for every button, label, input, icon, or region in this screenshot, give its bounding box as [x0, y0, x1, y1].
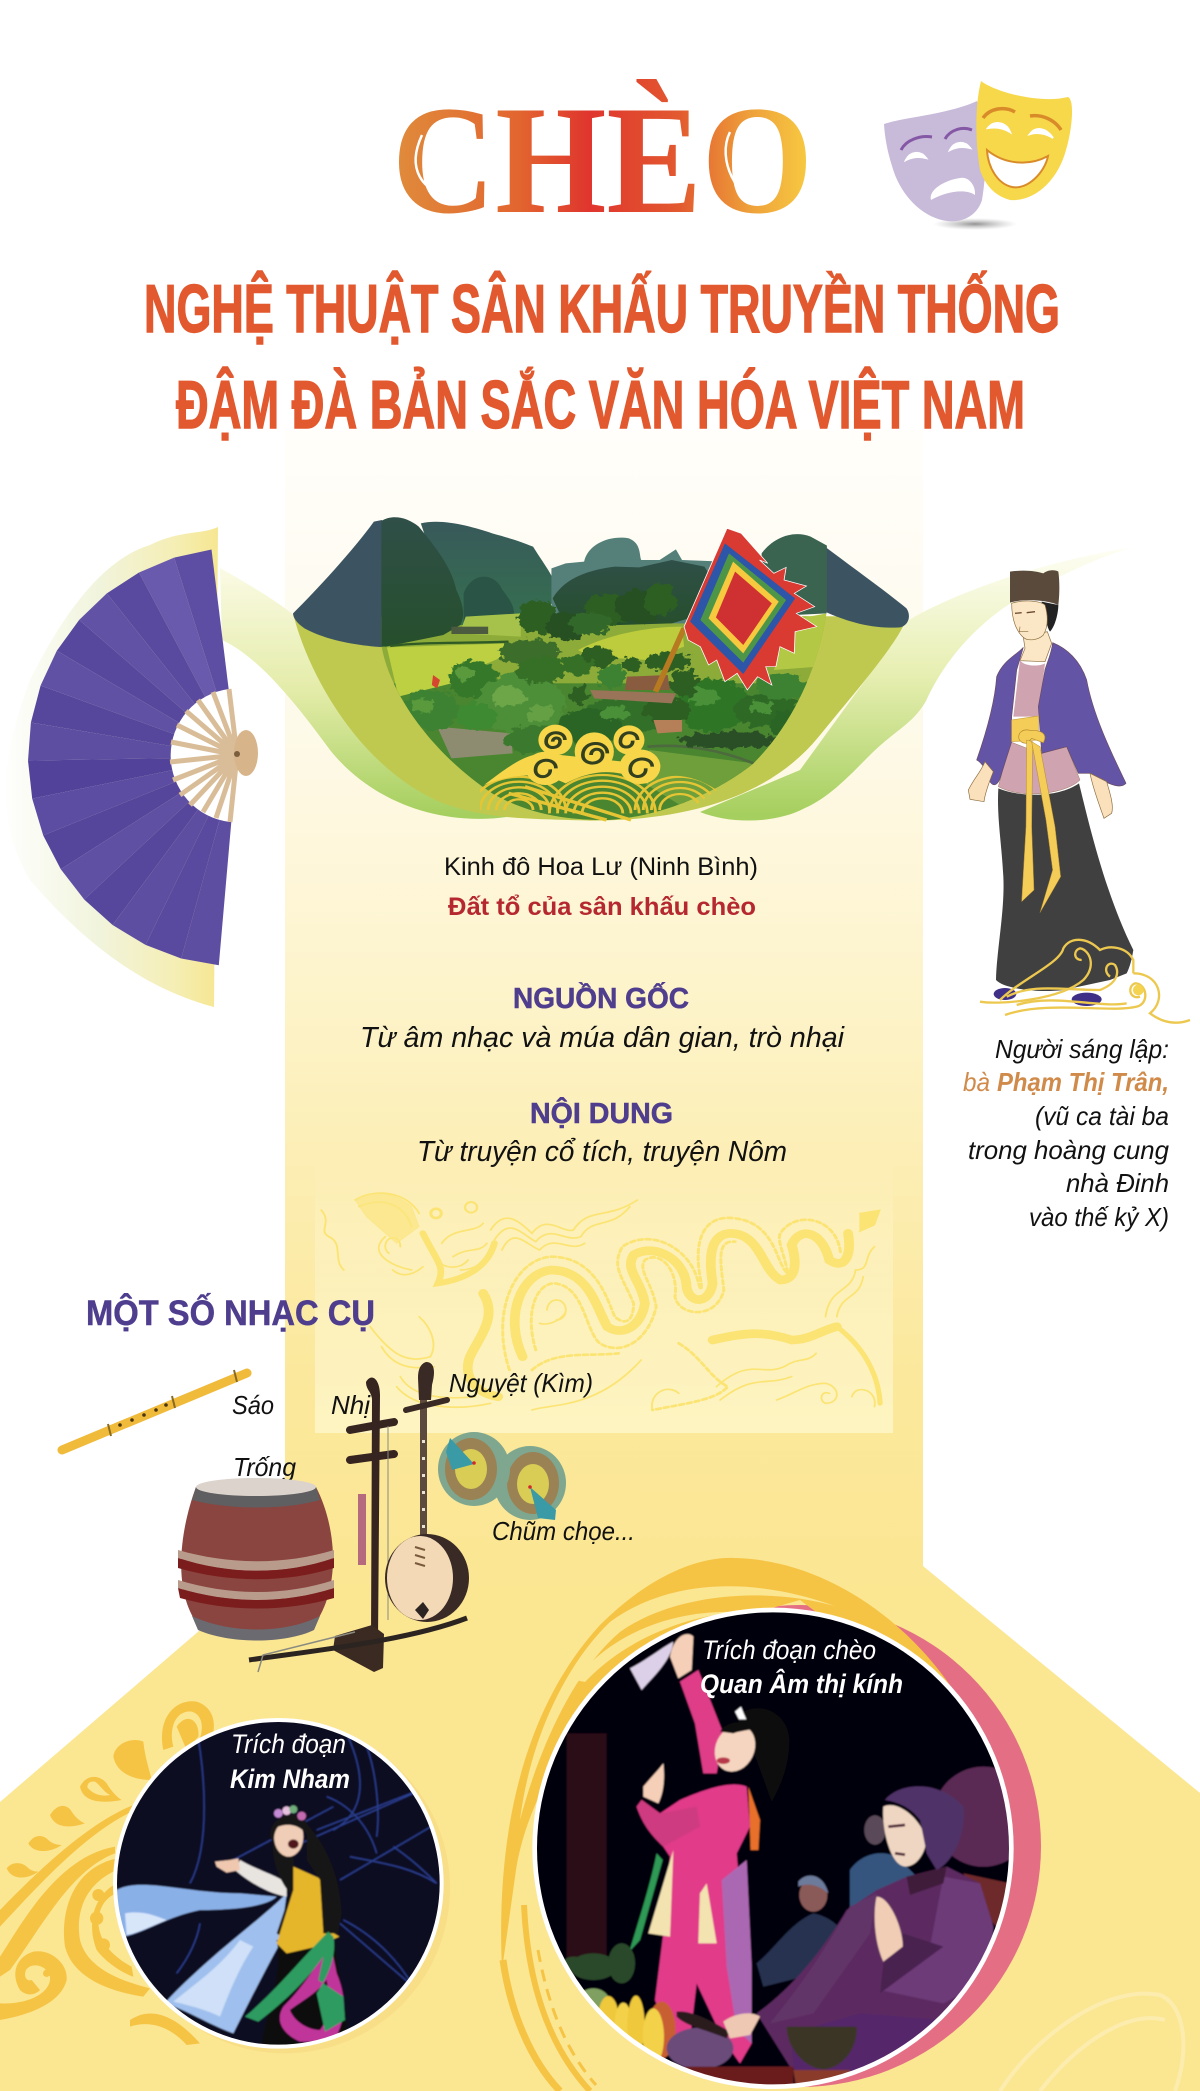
icon: đàn nguyệt — [385, 1362, 469, 1622]
caption: founder: vào thế kỷ X) — [1029, 1202, 1169, 1232]
caption: Quan Âm thị kính: Quan Âm thị kính — [700, 1668, 903, 1699]
panel: landscape of Hoa Lư — [293, 517, 909, 823]
panel: Kim Nham photo — [0, 1701, 450, 2057]
text block: origin — [360, 981, 846, 1054]
caption: Quan Âm thị kính: Trích đoạn chèo — [702, 1635, 876, 1665]
photo content — [530, 1607, 1033, 2091]
label: Nhị: Nhị — [331, 1390, 371, 1420]
label: Trống: Trống — [233, 1452, 297, 1482]
text block: origin: NGUỒN GỐC — [513, 981, 689, 1015]
caption: Hoa Lư: Kinh đô Hoa Lư (Ninh Bình) — [444, 853, 758, 881]
label: Nguyệt: Nguyệt (Kìm) — [449, 1368, 593, 1398]
caption: founder: bà — [963, 1067, 990, 1097]
slate wedge: left — [293, 520, 385, 647]
trees — [403, 583, 807, 753]
icon: sáo flute — [62, 1370, 247, 1450]
heading — [144, 270, 1060, 443]
caption: Hoa Lư — [444, 853, 758, 921]
icon: chũm chọe cymbals — [438, 1432, 566, 1520]
panel: Quan Âm thị kính photo — [530, 1607, 1033, 2091]
text block: content: Từ truyện cổ tích, truyện Nôm — [417, 1136, 787, 1168]
photo content — [117, 1722, 440, 2045]
decoration: pink crescent — [559, 1605, 1041, 2087]
icon: purple fan — [6, 527, 258, 1007]
icon: festival flag — [656, 528, 817, 692]
caption: founder — [963, 1034, 1170, 1232]
caption: Kim Nham: Kim Nham — [230, 1764, 350, 1794]
label: Sáo: Sáo — [232, 1390, 274, 1420]
decorative pale curves — [1000, 1994, 1183, 2091]
caption: Kim Nham: Trích đoạn — [231, 1729, 346, 1759]
icon: đàn nhị — [249, 1378, 467, 1672]
text block: content — [417, 1096, 787, 1168]
caption: founder: Phạm Thị Trân, — [997, 1067, 1169, 1097]
photo shadow crescent — [120, 1723, 450, 2053]
caption: Quan Âm thị kính — [700, 1635, 903, 1699]
background column and flare — [0, 430, 1200, 2091]
caption: founder: nhà Đinh — [1066, 1168, 1169, 1198]
icon: golden clouds and waves — [472, 725, 725, 820]
text block: content: NỘI DUNG — [530, 1096, 673, 1130]
panel: dragon relief — [315, 1158, 893, 1433]
title CHÈO: CHÈO — [392, 74, 813, 246]
icon: theatre masks — [884, 81, 1072, 230]
green ribbon: left — [220, 568, 520, 819]
text block: origin: Từ âm nhạc và múa dân gian, trò nhại — [360, 1022, 846, 1054]
green bowl — [293, 613, 909, 821]
caption: founder: trong hoàng cung — [968, 1135, 1170, 1165]
photo: mountains and fields — [378, 517, 831, 823]
slate wedge: right — [825, 547, 909, 628]
heading: instruments: MỘT SỐ NHẠC CỤ — [86, 1293, 375, 1333]
photo frame — [113, 1718, 444, 2049]
green ribbon: right — [700, 548, 1130, 821]
caption: founder: Người sáng lập: — [995, 1034, 1169, 1064]
decoration: gold arcs — [501, 1558, 980, 1970]
decoration: gold lines — [503, 1905, 596, 2091]
caption: Kim Nham — [230, 1729, 350, 1794]
label: Chũm chọe: Chũm chọe... — [492, 1516, 635, 1546]
caption: Hoa Lư: Đất tổ của sân khấu chèo — [448, 893, 756, 921]
photo frame — [532, 1608, 1014, 2089]
figure: Phạm Thị Trân — [968, 570, 1190, 1023]
icon: trống drum — [178, 1478, 334, 1640]
caption: founder: (vũ ca tài ba — [1035, 1101, 1169, 1131]
decoration: gold swirl — [0, 1701, 214, 2045]
